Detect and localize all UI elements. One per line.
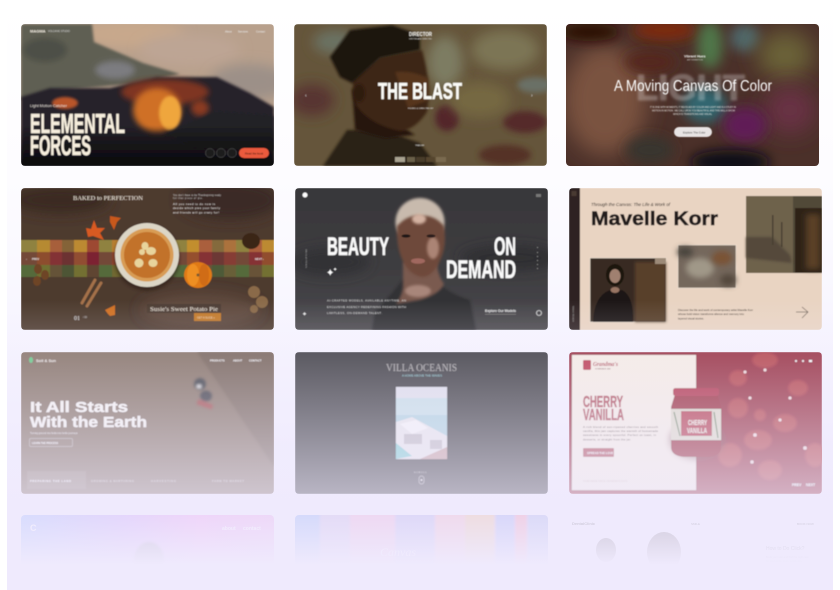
panel: Cherry Vanilla jam template: CHERRY (583, 394, 623, 411)
panel: Baked to Perfection pie template: / 03 (83, 316, 88, 319)
panel: A Moving Canvas Of Color template: MOTION IN MOTION. WE CALL UPON YOU BEAUTIFUL AND THIS WILL A SHOW (652, 110, 736, 112)
panel: faded colourful curtains template: Canvas (380, 545, 416, 559)
icon: pumpkin (184, 262, 212, 288)
panel: Mavelle Korr art template: Discover the life and work of contemporary artist Mavelle Korr (678, 308, 753, 312)
logo: Grandma's (593, 362, 619, 368)
panel: Soil and Sun farming template: ABOUT (233, 358, 243, 362)
panel: Cherry Vanilla jam template: A rich blend of sun-ripened cherries and smooth (583, 425, 658, 429)
panel: Cherry Vanilla jam template: HAND-MADE SINCE GRANDMA'S DAYS (583, 480, 628, 483)
panel: Soil and Sun farming template: Turning ground into fields into fertile journeys (30, 432, 78, 435)
panel: The Blast director template: FILMED & DIRECTED BY (408, 108, 434, 110)
panel: The Blast director template: › (531, 93, 533, 99)
panel: Beauty On Demand template: BEAUTY (327, 233, 389, 261)
icon: jam jar: CHERRY (688, 420, 707, 427)
panel: Beauty On Demand template: LIMITLESS, ON-DEMAND TALENT. (327, 311, 382, 315)
panel: Elemental Forces volcano template: ELEMENTAL (30, 108, 125, 139)
panel: Baked to Perfection pie template: NEXT › (255, 257, 264, 261)
panel: Soil and Sun farming template: PREPARING THE LAND (30, 479, 71, 483)
panel: Beauty On Demand template: Explore Our Models (485, 309, 516, 313)
panel: A Moving Canvas Of Color template: WHICH IS TRANSITIONS AND VISUAL (673, 113, 713, 116)
panel: faded dental clinic template: BOOK NOW (797, 522, 814, 526)
panel: Beauty On Demand template: ✦ (302, 311, 307, 318)
icon: arrow (796, 307, 808, 318)
panel: Elemental Forces volcano template: Light Motion Catcher (30, 103, 68, 108)
panel: Baked to Perfection pie template: and friends will go crazy for! (173, 210, 219, 214)
panel: Mavelle Korr art template (569, 188, 822, 330)
panel: Elemental Forces volcano template: FORCES (30, 130, 91, 161)
panel: faded dental clinic template: for your smile, every single day. (766, 559, 803, 563)
texture painting (677, 245, 736, 288)
panel: Cherry Vanilla jam template: NEXT (806, 483, 816, 487)
panel: The Blast director template: DIRECTOR (409, 32, 432, 38)
panel: Cherry Vanilla jam template: PREV (792, 483, 802, 487)
panel: Beauty On Demand template: SCROLL UP TO SEE (306, 248, 308, 268)
panel: Mavelle Korr art template: Mavelle Korr (591, 209, 719, 230)
panel: Beauty On Demand template: ✦ (333, 267, 337, 273)
panel: A Moving Canvas Of Color template (566, 24, 819, 166)
panel: Mavelle Korr art template: layered visual stories. (678, 316, 704, 320)
panel: The Blast director template (290, 24, 553, 166)
panel: faded gradient template: about (222, 526, 236, 532)
panel: A Moving Canvas Of Color template: ART EXHIBITION (687, 58, 703, 62)
plaid table runner (21, 240, 274, 277)
icon: portrait (372, 198, 476, 330)
panel: faded gradient template (21, 515, 274, 550)
panel: Mavelle Korr art template: Through the Canvas: The Life & Work of (591, 202, 671, 207)
fade overlay (7, 300, 833, 590)
panel: Villa Oceanis template: SCROLL (414, 472, 428, 474)
icon: jam jar: VANILLA (687, 428, 707, 435)
portrait of the artist (590, 258, 666, 322)
panel: Soil and Sun farming template: With the Earth (30, 414, 147, 431)
panel: Baked to Perfection pie template (21, 188, 274, 330)
panel: The Blast director template: WRITTEN AND DIRECTED (409, 38, 433, 40)
villa photo (396, 387, 447, 459)
panel: Baked to Perfection pie template: decide which pies your family (173, 206, 221, 210)
panel: Baked to Perfection pie template: 01 (74, 316, 80, 322)
panel: Soil and Sun farming template: PRODUCTS (210, 358, 225, 362)
panel: Cherry Vanilla jam template: VANILLA (583, 407, 624, 424)
icon: tractor (194, 378, 213, 410)
panel: Soil and Sun farming template: HARVESTING (151, 479, 176, 483)
icon: pie (114, 223, 180, 291)
panel: Elemental Forces volcano template: Read the book (245, 152, 264, 156)
panel: faded dental clinic template: How to Do Click? (766, 546, 805, 552)
panel: faded gradient template: contact (243, 526, 261, 532)
panel: Baked to Perfection pie template: PREV (32, 257, 39, 261)
panel: faded colourful curtains template (295, 515, 548, 550)
panel: Elemental Forces volcano template: Contact (256, 30, 265, 34)
panel: faded dental clinic template: DentalClinic (572, 521, 596, 526)
panel: faded dental clinic template (572, 522, 814, 554)
panel: A Moving Canvas Of Color template: Vibrant Hues (684, 54, 706, 58)
panel: Elemental Forces volcano template: Services (238, 30, 249, 34)
panel: A Moving Canvas Of Color template: IT IS ONE WITH MOMENTS, IT REVOLVES BY COLOR AND LIGHT AND IS A STUDY IN (650, 106, 736, 109)
panel: Cherry Vanilla jam template (569, 352, 825, 494)
icon: jam jar (669, 388, 725, 460)
panel: Soil and Sun farming template: FARM TO MARKET (212, 479, 244, 483)
panel: Beauty On Demand template: EXCLUSIVE AGENCY REDEFINING FASHION WITH (327, 305, 406, 309)
panel: Beauty On Demand template: ON (494, 233, 516, 261)
panel: Elemental Forces volcano template: MAGMA (30, 28, 46, 34)
panel: Soil and Sun farming template: It All Starts (30, 399, 128, 416)
panel: Baked to Perfection pie template: All you need to do now is (173, 202, 216, 206)
panel: Soil and Sun farming template: Soil & Sun (36, 358, 57, 363)
logo: HOMEMADE JAM (595, 368, 611, 370)
panel: Mavelle Korr art template: SCROLL DOWN (573, 305, 575, 322)
panel: Baked to Perfection pie template: You don't have to be Thanksgiving ready (173, 194, 222, 197)
panel: Villa Oceanis template: A HOME ABOVE THE WAVES (402, 374, 442, 378)
panel: Baked to Perfection pie template: for that piece of pie. (173, 197, 203, 200)
panel: Cherry Vanilla jam template: sweetness in every spoonful. Perfect on toast, in (583, 433, 656, 437)
panel: The Blast director template: THE BLAST (378, 78, 462, 104)
panel: Beauty On Demand template (290, 188, 560, 330)
panel: Baked to Perfection pie template: BAKED to PERFECTION (73, 196, 144, 202)
panel: Villa Oceanis template (295, 352, 548, 494)
panel: Beauty On Demand template: ✦ (326, 268, 334, 279)
panel: faded dental clinic template: SMILE (691, 522, 700, 526)
panel: Villa Oceanis template: VILLA OCEANIS (386, 363, 457, 374)
panel: Soil and Sun farming template: CONTACT (249, 358, 262, 362)
panel: Beauty On Demand template: DEMAND (446, 256, 516, 284)
building painting (746, 196, 822, 273)
logo (583, 360, 619, 370)
panel: A Moving Canvas Of Color template: A Moving Canvas Of Color (614, 78, 772, 95)
panel: Cherry Vanilla jam template: SPREAD THE LOVE (587, 451, 614, 455)
panel: faded gradient template: C (30, 523, 37, 533)
panel: Elemental Forces volcano template (21, 20, 290, 166)
panel: A Moving Canvas Of Color template: Explore The Color (683, 130, 706, 134)
panel: The Blast director template: TRAILER (415, 144, 425, 147)
panel: Soil and Sun farming template: LEARN THE PROCESS (32, 442, 58, 445)
panel: Cherry Vanilla jam template: vanilla, this jam captures the warmth of homemade (583, 429, 658, 433)
panel: Mavelle Korr art template: whose bold vision transforms silence and memory into (678, 312, 744, 316)
panel: Cherry Vanilla jam template: desserts, or straight from the jar. (583, 438, 631, 442)
panel: Baked to Perfection pie template: Susie's Sweet Potato Pie (150, 306, 218, 313)
panel: faded dental clinic template: Book your visit and find the right care (766, 555, 809, 559)
panel: Soil and Sun farming template: GROWING & NURTURING (91, 479, 134, 483)
panel: Baked to Perfection pie template: ‹ (26, 257, 27, 261)
panel: A Moving Canvas Of Color template: LIGHT (636, 67, 745, 108)
panel: Elemental Forces volcano template: About (225, 30, 232, 34)
panel: Elemental Forces volcano template: VOLCANIC STUDIO (48, 30, 70, 33)
panel: Beauty On Demand template: AI-CRAFTED MODELS, AVAILABLE ANYTIME. AN (327, 298, 406, 302)
panel: Soil and Sun farming template (21, 352, 274, 494)
panel: Baked to Perfection pie template: GET A SLICE » (197, 316, 215, 320)
panel: The Blast director template: ‹ (305, 93, 307, 99)
